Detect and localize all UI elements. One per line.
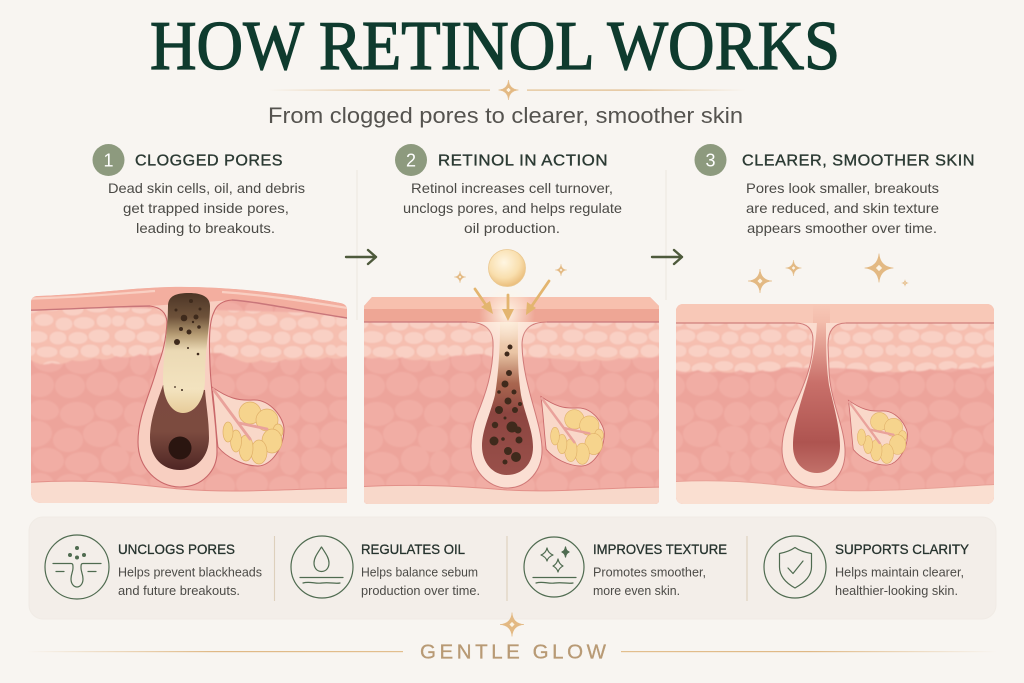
faint column dividers <box>357 170 666 320</box>
retinol arrows into pore <box>475 281 549 321</box>
arrow: step 1 to step 2 <box>346 250 376 264</box>
icon: shield with check <box>764 536 826 598</box>
step 3 number badge: 3 <box>705 150 716 170</box>
title divider with sparkle <box>268 80 746 100</box>
step 1 description: leading to breakouts. <box>136 220 275 236</box>
benefit: supports clarity <box>764 536 969 598</box>
step 3 heading: CLEARER, SMOOTHER SKIN <box>742 152 975 170</box>
icon: oil droplet over skin <box>291 536 353 598</box>
follicle wall <box>467 322 547 488</box>
description <box>118 566 262 598</box>
description: Helps balance sebum <box>361 566 478 580</box>
step 3 description: are reduced, and skin texture <box>746 200 939 216</box>
step 2 heading: RETINOL IN ACTION <box>438 152 608 170</box>
sebum and debris plug <box>163 293 210 413</box>
follicle wall <box>138 300 232 487</box>
step 3 number badge <box>694 144 726 176</box>
unclogging follicle interior <box>482 322 533 475</box>
icon: sparkles over smooth skin <box>524 537 584 597</box>
step 3 description: appears smoother over time. <box>747 220 937 236</box>
icon: pore with particles <box>45 535 109 599</box>
step 3 text <box>694 144 975 236</box>
debris specks <box>174 299 202 391</box>
sebaceous gland <box>848 400 907 465</box>
debris particles <box>490 344 522 464</box>
step 2 number badge <box>395 144 427 176</box>
description: healthier-looking skin. <box>835 584 958 598</box>
panel: retinol in action skin cross-section <box>354 250 669 512</box>
heading: REGULATES OIL <box>361 542 465 557</box>
step 3 description <box>746 180 939 236</box>
step 2 description <box>403 180 622 236</box>
step 1 heading: CLOGGED PORES <box>135 152 283 170</box>
step 1 description <box>108 180 305 236</box>
step 1 number badge <box>92 144 124 176</box>
panel: benefits bar <box>29 517 996 619</box>
pore opening shading <box>813 304 830 323</box>
clear follicle interior <box>793 322 840 473</box>
heading: UNCLOGS PORES <box>118 542 235 557</box>
step 1 description: get trapped inside pores, <box>123 200 289 216</box>
arrow: step 2 to step 3 <box>652 250 682 264</box>
subtitle: From clogged pores to clearer, smoother skin <box>268 103 743 128</box>
sparkles <box>454 264 567 283</box>
description: Helps prevent blackheads <box>118 566 262 580</box>
sparkles of clear skin <box>748 254 908 293</box>
footer brand <box>27 612 997 664</box>
description: more even skin. <box>593 584 680 598</box>
step 2 number badge: 2 <box>406 150 416 170</box>
blackhead core <box>168 436 192 460</box>
benefit: regulates oil <box>291 536 480 598</box>
panel: clearer skin cross-section <box>666 254 1004 514</box>
description: production over time. <box>361 584 480 598</box>
description: Helps maintain clearer, <box>835 566 964 580</box>
trapped sebum lower follicle <box>150 385 209 470</box>
footer brand: GENTLE GLOW <box>420 640 607 664</box>
step 2 description: oil production. <box>464 220 560 236</box>
benefit: unclogs pores <box>45 535 262 599</box>
step 1 description: Dead skin cells, oil, and debris <box>108 180 305 196</box>
retinol droplet <box>488 250 526 286</box>
description <box>361 566 480 598</box>
heading: SUPPORTS CLARITY <box>835 542 969 557</box>
step 2 description: Retinol increases cell turnover, <box>411 180 613 196</box>
retinol glow at pore <box>479 284 535 344</box>
description: and future breakouts. <box>118 584 240 598</box>
description <box>593 566 706 598</box>
benefit: improves texture <box>524 537 727 598</box>
follicle wall <box>782 323 846 487</box>
sebaceous gland <box>541 397 604 466</box>
step 1 number badge: 1 <box>103 150 114 170</box>
heading: IMPROVES TEXTURE <box>593 542 727 557</box>
description: Promotes smoother, <box>593 566 706 580</box>
description <box>835 566 964 598</box>
sebaceous gland <box>212 387 284 466</box>
step 3 description: Pores look smaller, breakouts <box>746 180 939 196</box>
panel: clogged pore skin cross-section <box>31 286 347 503</box>
step 2 text <box>395 144 622 236</box>
step 2 description: unclogs pores, and helps regulate <box>403 200 622 216</box>
title: HOW RETINOL WORKS <box>150 8 840 85</box>
step 1 text <box>92 144 305 236</box>
